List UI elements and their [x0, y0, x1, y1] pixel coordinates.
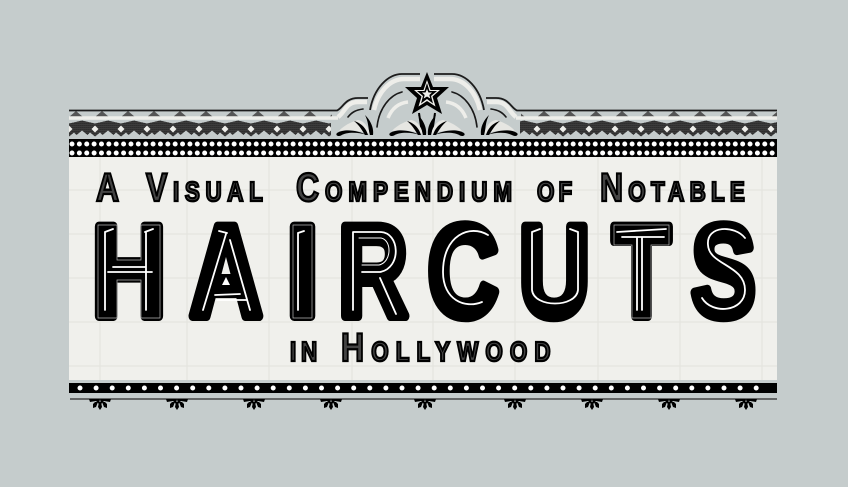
star: [405, 72, 449, 114]
main title: HAIRCUTS: S: [691, 199, 756, 344]
light band: [69, 116, 777, 120]
main title: HAIRCUTS: I: [286, 200, 319, 345]
heading line: A Visual Compendium of Notable: [96, 165, 745, 210]
inner arcs: [348, 92, 506, 127]
main title: HAIRCUTS: H: [92, 198, 166, 344]
crown ornament: [69, 72, 777, 136]
title inline highlights: [98, 225, 745, 318]
heading line: A Visual Compendium of Notable: VISUAL: [146, 165, 263, 210]
fans: [336, 115, 518, 136]
heading line: A Visual Compendium of Notable: OF: [537, 177, 572, 208]
white bands: [338, 79, 516, 117]
triangle row: [70, 111, 777, 118]
main title: HAIRCUTS: U: [519, 200, 590, 344]
main title: HAIRCUTS: [92, 198, 756, 345]
upper dotted light band: [69, 139, 777, 157]
heading line: A Visual Compendium of Notable: COMPENDIUM: [296, 165, 512, 210]
main title: HAIRCUTS: A: [190, 198, 262, 344]
heading line: A Visual Compendium of Notable: A: [96, 165, 119, 210]
main title: HAIRCUTS: R: [338, 199, 408, 344]
subtitle: in Hollywood: H OLLYWOOD: [341, 325, 551, 370]
outline arcs: [69, 74, 777, 110]
sign panel: [69, 157, 777, 380]
bottom fan ornaments: [89, 399, 757, 410]
heading line: A Visual Compendium of Notable: NOTABLE: [600, 165, 745, 210]
bottom rule: [70, 398, 777, 400]
lower dotted light band: [69, 383, 777, 393]
marquee top frieze: [69, 111, 777, 137]
main title: HAIRCUTS: T: [613, 199, 670, 345]
main title: HAIRCUTS: C: [428, 199, 498, 344]
subtitle: in Hollywood: IN: [290, 337, 317, 368]
diamond pattern band: [69, 120, 777, 137]
